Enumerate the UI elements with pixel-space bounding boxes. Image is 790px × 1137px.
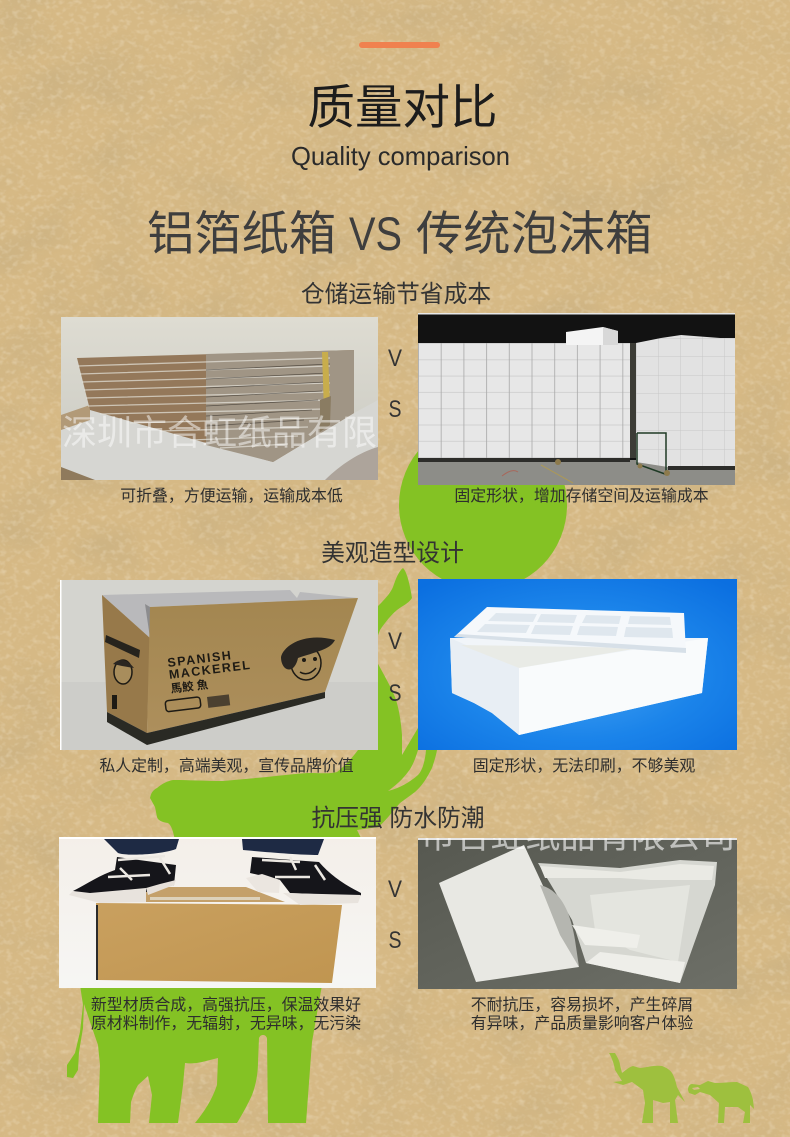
- photo: broken foam box: [418, 838, 737, 989]
- photo: folded foil cardboard stack: [61, 317, 378, 480]
- V S label, row one: S: [388, 396, 402, 423]
- V S label, row three: S: [388, 927, 402, 954]
- V S label, row one: V: [388, 345, 402, 372]
- title: 质量对比: [308, 82, 498, 135]
- V S label, row one: [388, 345, 402, 423]
- box label text: [168, 650, 250, 694]
- V S label, row two: [388, 628, 402, 707]
- caption: foam box weakness: [471, 996, 693, 1032]
- box label text: MACKEREL: [168, 658, 252, 682]
- comparison heading: [147, 208, 652, 261]
- caption: foil box strength: 原材料制作，无辐射，无异味，无污染: [91, 1014, 361, 1032]
- photo: sneakers standing on cardboard box: [59, 837, 376, 988]
- V S label, row two: S: [388, 680, 402, 707]
- V S label, row two: V: [388, 628, 402, 655]
- accent bar: [359, 42, 440, 48]
- caption: foil box strength: [91, 996, 361, 1032]
- comparison heading: VS: [349, 208, 402, 261]
- box label text: 馬鮫 魚: [170, 677, 209, 696]
- mascot head: [281, 638, 335, 680]
- section heading: appearance design: 美观造型设计: [321, 540, 464, 567]
- comparison heading: 传统泡沫箱: [416, 208, 652, 261]
- side mascot and badges: [105, 635, 230, 712]
- photo: stacked foam boxes in warehouse: [418, 313, 735, 485]
- caption: foil box strength: 新型材质合成，高强抗压，保温效果好: [91, 996, 361, 1014]
- watermark: 深圳市合虹纸品有限: [62, 414, 377, 453]
- caption: foam box weakness: 有异味，产品质量影响客户体验: [471, 1014, 693, 1032]
- comparison heading: 铝箔纸箱: [147, 208, 336, 261]
- caption: foil box storage: 可折叠，方便运输，运输成本低: [120, 487, 343, 505]
- photo: printed cardboard box: [60, 580, 378, 750]
- subtitle: Quality comparison: [291, 143, 510, 171]
- icon: two small elephants: [609, 1053, 754, 1123]
- photo: white foam box on blue: [418, 579, 737, 750]
- V S label, row three: V: [388, 876, 402, 903]
- caption: foil box appearance: 私人定制，高端美观，宣传品牌价值: [99, 757, 354, 775]
- caption: foam box weakness: 不耐抗压，容易损坏，产生碎屑: [471, 996, 693, 1014]
- green elephant silhouette behind the content: [67, 420, 567, 1123]
- caption: foam box storage: 固定形状，增加存储空间及运输成本: [454, 487, 709, 505]
- caption: foam box appearance: 固定形状，无法印刷，不够美观: [473, 757, 695, 775]
- box label text: SPANISH: [167, 648, 233, 670]
- watermark: 市合虹纸品有限公司: [420, 817, 736, 856]
- V S label, row three: [388, 876, 402, 954]
- section heading: storage and shipping: 仓储运输节省成本: [301, 281, 491, 308]
- section heading: strength and waterproofing: 抗压强 防水防潮: [311, 805, 485, 832]
